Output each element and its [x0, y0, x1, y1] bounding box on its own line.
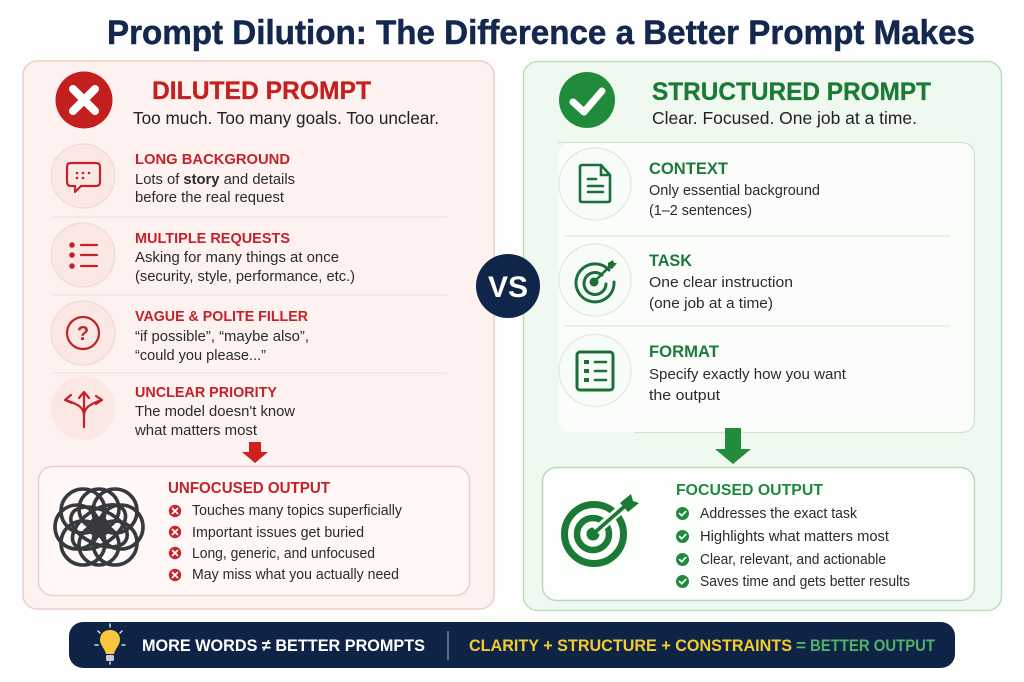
- item: multiple requests: [51, 223, 355, 287]
- banner text: better output: BETTER OUTPUT: [810, 636, 936, 655]
- icon: document: [559, 148, 631, 220]
- banner text: formula: CLARITY + STRUCTURE + CONSTRAINTS: [469, 636, 792, 655]
- item heading: MULTIPLE REQUESTS: [135, 230, 290, 247]
- bullet: clear and relevant: Clear, relevant, and actionable: [700, 552, 886, 568]
- icon: question mark: [51, 301, 115, 365]
- output heading: FOCUSED OUTPUT: [676, 482, 823, 499]
- icon: question mark: ?: [77, 323, 89, 345]
- item text line 2: before the real request: [135, 190, 284, 206]
- item: long background: [51, 144, 295, 208]
- heading: diluted prompt: DILUTED PROMPT: [152, 77, 371, 105]
- icon: light bulb: [95, 624, 125, 664]
- panel: diluted prompt: [23, 61, 494, 609]
- icon: speech bubble: [51, 144, 115, 208]
- item heading: UNCLEAR PRIORITY: [135, 384, 277, 401]
- item text line 1: Asking for many things at once: [135, 250, 339, 266]
- arrow: red down: [242, 442, 268, 463]
- bullet: issues buried: Important issues get buried: [192, 525, 364, 541]
- item text line 2: “could you please...”: [135, 348, 266, 364]
- bullet: highlights: Highlights what matters most: [700, 529, 889, 545]
- item heading: TASK: [649, 252, 692, 270]
- item text line 2: (one job at a time): [649, 296, 773, 312]
- bullet: long and generic: Long, generic, and unfocused: [192, 546, 375, 562]
- title: Prompt Dilution: The Difference a Better Prompt Makes: [107, 14, 975, 52]
- subtitle: diluted prompt: Too much. Too many goals. Too unclear.: [133, 108, 439, 128]
- bullet: touches many topics: Touches many topics superficially: [192, 503, 403, 519]
- item heading: CONTEXT: [649, 160, 728, 178]
- subtitle: structured prompt: Clear. Focused. One job at a time.: [652, 108, 917, 128]
- item: context: [559, 148, 820, 220]
- output heading: UNFOCUSED OUTPUT: [168, 480, 331, 497]
- bullet: may miss: May miss what you actually need: [192, 567, 399, 583]
- icon: list: [51, 223, 115, 287]
- arrow: green down: [715, 428, 751, 464]
- panel: prompt structure: [558, 142, 974, 432]
- icon: large target with arrow: [564, 494, 639, 564]
- item text line 1: The model doesn't know: [135, 404, 296, 420]
- item heading: FORMAT: [649, 343, 719, 361]
- item: unclear priority: [51, 376, 296, 440]
- banner: key takeaway: [69, 622, 955, 668]
- item: format: [559, 334, 846, 406]
- item text line 1: Lots of story and details: [135, 172, 295, 188]
- bullet: addresses task: Addresses the exact task: [700, 506, 858, 522]
- panel: structured prompt: [524, 62, 1002, 610]
- badge: VS: [476, 254, 540, 318]
- item: vague and polite filler: [51, 301, 309, 365]
- item heading: LONG BACKGROUND: [135, 151, 290, 168]
- item text line 2: (security, style, performance, etc.): [135, 269, 355, 285]
- heading: structured prompt: STRUCTURED PROMPT: [652, 78, 931, 106]
- panel: focused output: [542, 468, 974, 600]
- icon: red cross badge: [56, 72, 112, 128]
- badge: VS: VS: [488, 271, 528, 304]
- item text line 2: what matters most: [134, 423, 257, 439]
- item text line 1: Only essential background: [649, 183, 820, 199]
- icon: small target: [559, 244, 631, 316]
- item: task: [559, 244, 793, 316]
- bullet: saves time: Saves time and gets better results: [700, 574, 910, 590]
- item text line 1: One clear instruction: [649, 275, 793, 291]
- banner text: equals: =: [796, 636, 806, 655]
- item text line 1: “if possible”, “maybe also”,: [135, 329, 309, 345]
- icon: tangled scribble: [55, 489, 143, 565]
- icon: checklist: [559, 334, 631, 406]
- item text line 1: Specify exactly how you want: [649, 367, 846, 383]
- icon: diverging arrows: [51, 376, 115, 440]
- item text line 2: the output: [649, 388, 720, 404]
- banner text: more words: MORE WORDS ≠ BETTER PROMPTS: [142, 636, 425, 655]
- item heading: VAGUE & POLITE FILLER: [135, 308, 308, 325]
- panel: unfocused output: [38, 466, 470, 596]
- icon: green check badge: [559, 72, 615, 128]
- item text line 2: (1–2 sentences): [649, 203, 752, 219]
